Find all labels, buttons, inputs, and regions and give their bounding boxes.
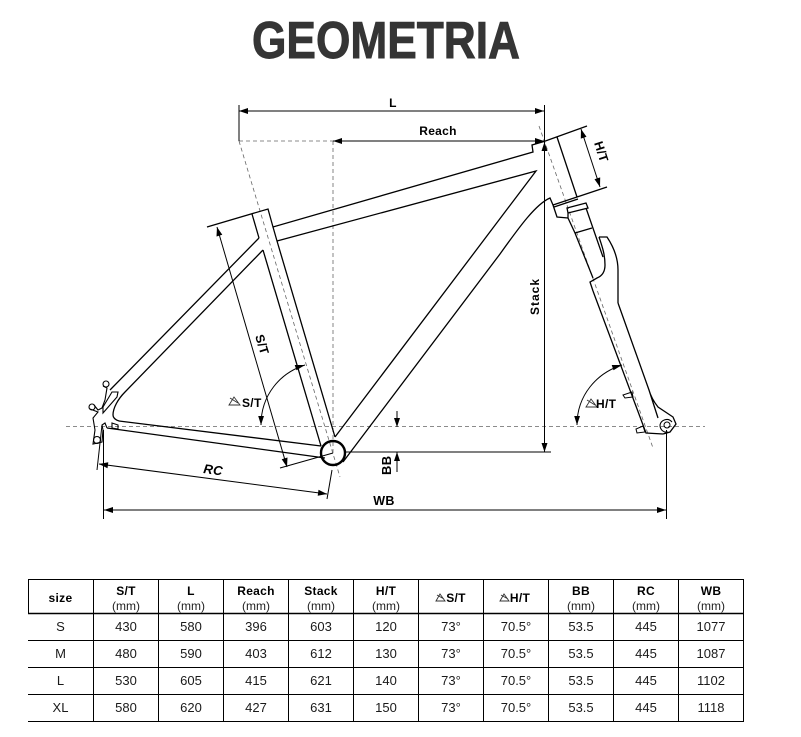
dimension: RC: RC xyxy=(203,461,224,479)
dimension: BB xyxy=(379,411,400,475)
table header row: S/T xyxy=(446,591,466,605)
row M: 403 xyxy=(245,646,267,661)
row S: 445 xyxy=(635,619,657,634)
seat stay xyxy=(110,238,263,421)
row M: 53.5 xyxy=(568,646,594,661)
row L: 445 xyxy=(635,673,657,688)
table header row: H/T xyxy=(510,591,530,605)
table header row: WB xyxy=(701,584,721,598)
row S: 396 xyxy=(245,619,267,634)
row XL: 73° xyxy=(441,700,461,715)
row L: 53.5 xyxy=(568,673,594,688)
table grid xyxy=(28,579,744,722)
row L: 621 xyxy=(310,673,332,688)
dimension: L xyxy=(239,96,544,142)
row M xyxy=(55,646,725,661)
head tube xyxy=(553,137,607,207)
head tube angle arc xyxy=(574,365,622,425)
dimension: H/T: H/T xyxy=(591,140,611,164)
dimension: H/T xyxy=(581,129,611,187)
fork axle xyxy=(660,419,672,432)
title: GEOMETRIA xyxy=(252,12,520,70)
row S xyxy=(56,619,725,634)
row S: 580 xyxy=(180,619,202,634)
row S: 73° xyxy=(441,619,461,634)
top tube and head junction xyxy=(207,126,587,227)
dimension: S/T xyxy=(216,227,333,468)
dimension: RC xyxy=(97,425,332,499)
seat tube angle arc: S/T xyxy=(242,396,262,410)
fork arch xyxy=(590,237,618,303)
centre and axis dashed reference lines xyxy=(66,126,705,477)
row L: 415 xyxy=(245,673,267,688)
row M: M xyxy=(55,646,66,661)
row L xyxy=(57,673,725,688)
row M: 480 xyxy=(115,646,137,661)
dimension: BB: BB xyxy=(379,456,394,475)
row XL: 1118 xyxy=(698,700,724,715)
bicycle frame xyxy=(89,126,676,465)
table header row: L xyxy=(187,584,195,598)
row L: 530 xyxy=(115,673,137,688)
dimension: WB: WB xyxy=(373,494,395,508)
row M: 73° xyxy=(441,646,461,661)
row S: 1077 xyxy=(697,619,725,634)
fork crown and stanchion xyxy=(567,203,603,278)
row M: 612 xyxy=(310,646,332,661)
row L: 1102 xyxy=(697,673,725,688)
row XL xyxy=(53,700,724,715)
row M: 1087 xyxy=(697,646,725,661)
table header row: (mm) xyxy=(112,599,140,613)
table header row: Reach xyxy=(237,584,275,598)
bike geometry diagram xyxy=(66,96,705,519)
row XL: 70.5° xyxy=(501,700,531,715)
down tube lower edge xyxy=(343,198,568,462)
chain stay xyxy=(107,421,325,458)
header rule xyxy=(28,612,744,614)
row XL: 580 xyxy=(115,700,137,715)
table header row xyxy=(49,584,725,613)
table header row: H/T xyxy=(376,584,396,598)
fork leg xyxy=(593,291,676,434)
table header row: BB xyxy=(572,584,590,598)
row XL: XL xyxy=(53,700,68,715)
row L: 605 xyxy=(180,673,202,688)
row L: 73° xyxy=(441,673,461,688)
dimension: S/T: S/T xyxy=(252,333,271,356)
table header row: (mm) xyxy=(177,599,205,613)
dimension: L: L xyxy=(389,96,397,110)
fork tabs xyxy=(623,392,645,433)
row M: 130 xyxy=(375,646,397,661)
table header row: (mm) xyxy=(567,599,595,613)
seat tube angle arc xyxy=(229,365,305,425)
row M: 70.5° xyxy=(501,646,531,661)
row XL: 53.5 xyxy=(568,700,594,715)
row S: 430 xyxy=(115,619,137,634)
row S: 53.5 xyxy=(568,619,594,634)
row XL: 445 xyxy=(635,700,657,715)
dimension: Reach xyxy=(333,124,544,144)
row S: 603 xyxy=(310,619,332,634)
row L: L xyxy=(57,673,64,688)
row S: S xyxy=(56,619,65,634)
table header row: (mm) xyxy=(242,599,270,613)
dimension: WB xyxy=(104,430,666,519)
row XL: 620 xyxy=(180,700,202,715)
dimension: Stack xyxy=(345,142,551,452)
table header row: S/T xyxy=(116,584,136,598)
table header row: (mm) xyxy=(307,599,335,613)
row S: 70.5° xyxy=(501,619,531,634)
row XL: 427 xyxy=(245,700,267,715)
row S: 120 xyxy=(375,619,397,634)
rear dropout xyxy=(89,381,118,444)
table header row: RC xyxy=(637,584,655,598)
geometry table xyxy=(28,579,744,722)
top tube lower edge and down tube upper edge xyxy=(277,171,536,437)
bottom bracket xyxy=(321,441,345,465)
row M: 590 xyxy=(180,646,202,661)
head tube angle arc: H/T xyxy=(596,397,617,411)
dimension: Stack: Stack xyxy=(528,278,542,315)
row XL: 631 xyxy=(310,700,332,715)
row M: 445 xyxy=(635,646,657,661)
table header row: size xyxy=(49,591,72,605)
row L: 140 xyxy=(375,673,397,688)
table header row: (mm) xyxy=(697,599,725,613)
row L: 70.5° xyxy=(501,673,531,688)
row XL: 150 xyxy=(375,700,397,715)
table header row: Stack xyxy=(304,584,338,598)
table header row: (mm) xyxy=(372,599,400,613)
seat tube xyxy=(252,214,335,446)
table header row: (mm) xyxy=(632,599,660,613)
dimension: Reach: Reach xyxy=(419,124,457,138)
